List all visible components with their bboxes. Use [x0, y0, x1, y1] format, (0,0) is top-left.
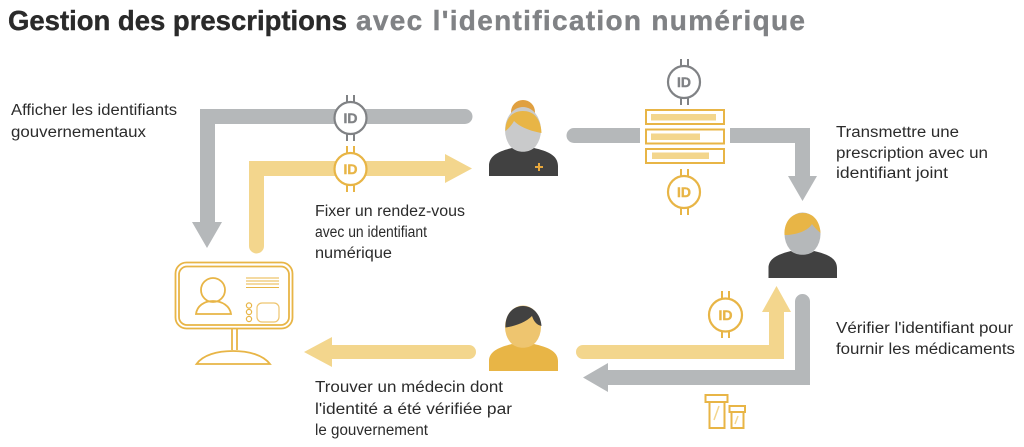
- text: transmit a prescription: prescription avec un: [836, 145, 988, 162]
- text: display government identifiers: gouvernementaux: [11, 124, 146, 141]
- arrow: yellow from patient to pharmacist: [576, 286, 791, 359]
- icon: gray ID token above list: [668, 59, 700, 105]
- icon: prescription list: [640, 105, 730, 168]
- text: make appointment: [315, 203, 465, 262]
- text: verify the identifier: fournir les médicaments: [836, 341, 1015, 358]
- arrow: gray from nurse to monitor: [192, 109, 473, 248]
- icon: yellow ID token below list: ID: [677, 184, 691, 200]
- title: [8, 5, 805, 36]
- text: transmit a prescription: Transmettre une: [836, 124, 959, 141]
- title: avec l'identification numérique: [356, 5, 805, 36]
- icon: yellow ID token: [334, 146, 366, 192]
- icon: yellow ID token near arrow: [709, 291, 742, 338]
- icon: yellow ID token below list: [668, 169, 700, 215]
- text: verify the identifier: [836, 320, 1015, 358]
- icon: patient: [489, 306, 558, 371]
- title: Gestion des prescriptions: [8, 5, 347, 36]
- icon: computer monitor: [176, 262, 292, 364]
- text: find a doctor: le gouvernement: [315, 422, 429, 439]
- arrow: yellow from monitor to nurse: [249, 154, 472, 254]
- arrow: yellow from patient to monitor: [304, 337, 476, 367]
- text: make appointment: numérique: [315, 245, 392, 262]
- text: display government identifiers: [11, 102, 177, 141]
- icon: gray ID token above list: ID: [677, 74, 691, 90]
- text: find a doctor: Trouver un médecin dont: [315, 379, 504, 396]
- text: transmit a prescription: [836, 124, 988, 182]
- text: make appointment: avec un identifiant: [315, 224, 428, 241]
- arrow: gray bar from nurse to pharmacist: [567, 128, 817, 201]
- icon: medicine bottles: [706, 395, 745, 428]
- text: verify the identifier: Vérifier l'identifiant pour: [836, 320, 1013, 337]
- text: make appointment: Fixer un rendez-vous: [315, 203, 465, 220]
- text: transmit a prescription: identifiant joint: [836, 165, 949, 182]
- text: find a doctor: [315, 379, 512, 439]
- icon: yellow ID token near arrow: ID: [718, 307, 732, 323]
- icon: gray ID token: [334, 95, 366, 141]
- icon: yellow ID token: ID: [344, 161, 358, 177]
- text: display government identifiers: Afficher les identifiants: [11, 102, 177, 119]
- icon: gray ID token: ID: [344, 110, 358, 126]
- icon: pharmacist: [768, 212, 837, 278]
- arrow: gray from pharmacist to patient: [583, 294, 810, 392]
- text: find a doctor: l'identité a été vérifiée par: [315, 401, 512, 418]
- icon: nurse: [489, 100, 558, 176]
